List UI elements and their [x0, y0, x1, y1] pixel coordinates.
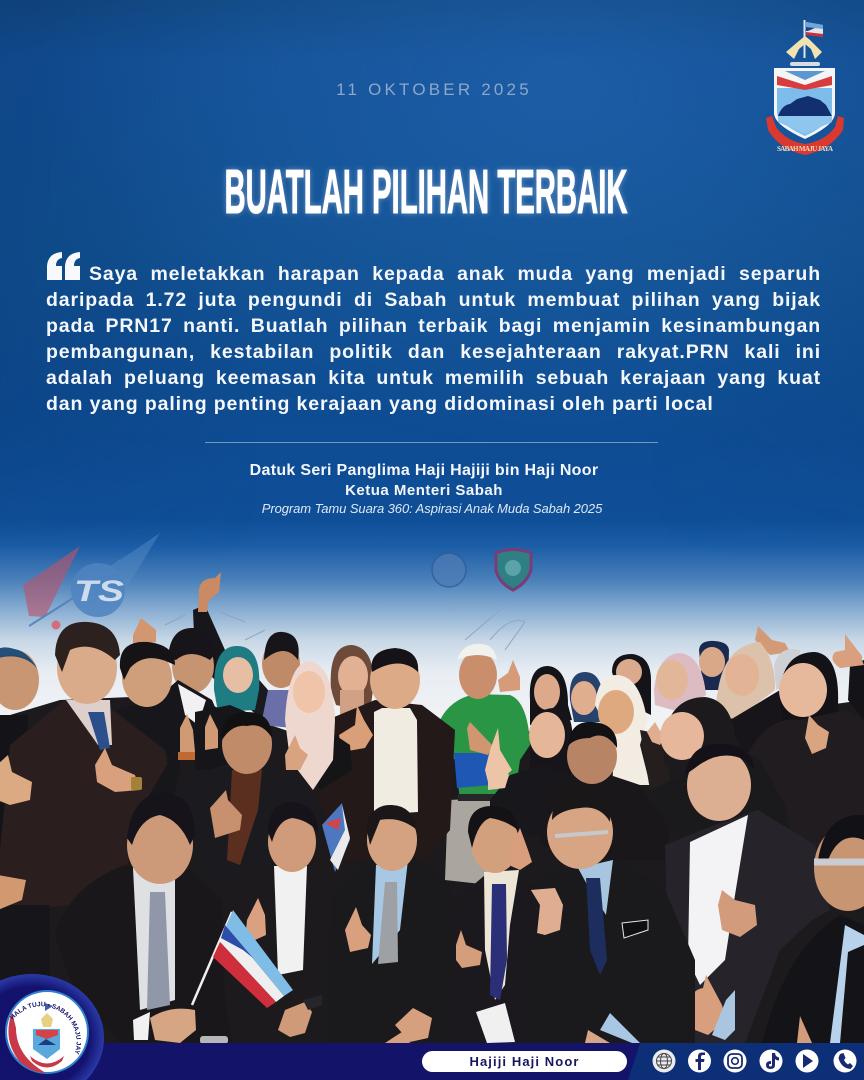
round campaign badge [0, 974, 104, 1080]
front man with patterned tie [318, 805, 455, 1043]
black hijab woman right [650, 697, 790, 830]
crest: state of Sabah coat of arms [766, 20, 844, 155]
suit man with brown shirt [175, 712, 318, 885]
crest: state of Sabah coat of arms: SABAH MAJU JAYA [777, 145, 833, 153]
icon: instagram [724, 1050, 746, 1072]
date: 11 OKTOBER 2025 [336, 80, 532, 99]
icon: facebook [688, 1050, 711, 1072]
attribution: Ketua Menteri Sabah [345, 482, 503, 499]
green shirt man with white cap [440, 644, 530, 885]
footer name pill: Hajiji Haji Noor [469, 1054, 580, 1069]
black hijab glasses woman [488, 708, 600, 840]
white hijab woman [595, 675, 670, 790]
main man in black suit [315, 648, 455, 860]
front left man [55, 793, 232, 1043]
front man with glasses right [762, 815, 864, 1043]
black hijab far right [745, 652, 864, 860]
icon: website globe [652, 1050, 676, 1072]
footer name pill [422, 1051, 627, 1072]
Sabah flag held [192, 910, 293, 1008]
left man brown suit [0, 622, 172, 910]
navy hijab [570, 672, 603, 722]
quote text: Saya meletakkan harapan kepada anak muda yang menjadi separuh [89, 263, 821, 285]
quote text: pembangunan, kestabilan politik dan kesejahteraan rakyat.PRN kali ini [46, 341, 821, 363]
quote text [46, 263, 821, 415]
backdrop graphic: Tamu Suara 360 logo: TS [74, 575, 124, 608]
icon: phone [834, 1050, 856, 1072]
icon: opening quotation mark [47, 252, 80, 280]
quote text: dan yang paling penting kerajaan yang didominasi oleh parti local [46, 393, 714, 415]
woman [331, 645, 373, 712]
pink hijab woman [285, 661, 335, 790]
raised arm with thumb [193, 605, 225, 680]
left far man [0, 650, 39, 710]
man in dark jacket with bangs [115, 642, 218, 830]
man 4 [172, 639, 214, 693]
beige hijab [715, 642, 795, 790]
front man with name tag [500, 789, 695, 1043]
attribution: Program Tamu Suara 360: Aspirasi Anak Muda Sabah 2025 [262, 501, 602, 516]
dark crowd base [0, 695, 864, 1043]
man in middle row [540, 722, 670, 860]
front man smiling blue tie [445, 806, 540, 1043]
backdrop graphic: Tamu Suara 360 logo [23, 533, 160, 630]
back row [0, 572, 862, 905]
attribution [250, 462, 602, 516]
quote text: pada PRN17 nanti. Buatlah pilihan terbaik bagi menjamin kesinambungan [46, 315, 821, 337]
small flag behind [322, 803, 350, 872]
bottom bar [0, 1043, 864, 1080]
right back heads [699, 641, 729, 690]
tall man white shirt right [665, 744, 830, 1043]
attribution: Datuk Seri Panglima Haji Hajiji bin Haji Noor [250, 462, 598, 479]
quote text: daripada 1.72 juta pengundi di Sabah untuk membuat pilihan yang bijak [46, 289, 821, 311]
front man white shirt [222, 802, 332, 1043]
backdrop logos [432, 550, 531, 590]
quote text: adalah peluang keemasan kita untuk memilih sebuah kerajaan yang kuat [46, 367, 821, 389]
pink hijab back [654, 653, 706, 712]
thumbs, hands, tag [200, 634, 864, 1044]
man with glasses back [262, 640, 300, 688]
teal hijab [214, 646, 259, 712]
icon: youtube play [796, 1050, 818, 1072]
dark left seated [0, 875, 50, 1015]
backdrop signatures [165, 605, 525, 650]
icon: tiktok [760, 1050, 782, 1072]
black hijab [530, 666, 572, 725]
divider [205, 442, 658, 444]
